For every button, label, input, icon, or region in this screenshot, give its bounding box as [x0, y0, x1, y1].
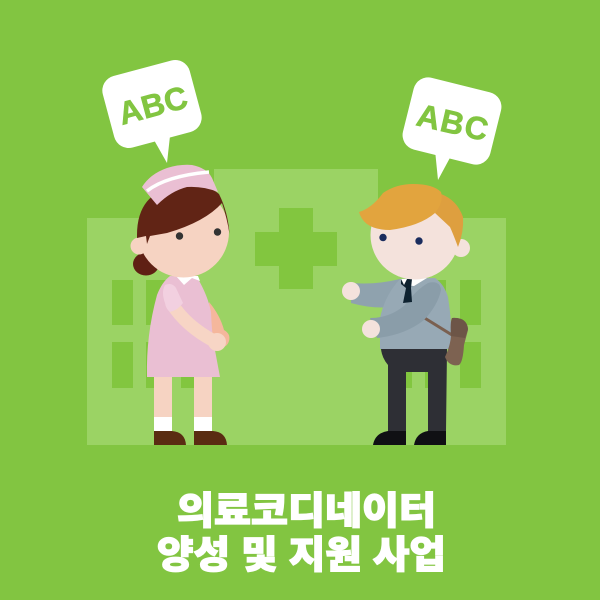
nurse cap stripe — [147, 172, 209, 191]
nurse hair bun — [133, 252, 159, 276]
nurse head — [138, 186, 229, 278]
title: 양성 및 지원 사업 — [157, 535, 446, 577]
title: 의료코디네이터 — [177, 491, 436, 533]
speech bubble: nurse ABC — [99, 57, 205, 163]
speech bubble: man ABC: ABC — [413, 97, 492, 148]
nurse socks — [154, 417, 212, 431]
nurse hand — [208, 333, 226, 351]
man character — [342, 184, 470, 445]
speech bubble: man ABC — [399, 74, 505, 180]
man legs and trousers — [381, 349, 447, 431]
hospital building — [87, 169, 506, 445]
nurse character — [130, 165, 230, 445]
nurse cap — [142, 165, 218, 205]
nurse collar — [176, 276, 200, 285]
man hair back — [435, 194, 463, 247]
nurse shoes — [154, 431, 227, 445]
nurse sleeve — [163, 284, 183, 312]
nurse legs — [154, 375, 212, 419]
title — [157, 491, 446, 577]
nurse ear — [130, 238, 148, 254]
man torso — [380, 278, 452, 349]
man shoes — [373, 431, 446, 445]
man ear — [452, 239, 470, 257]
man necktie — [401, 279, 412, 303]
man far arm — [351, 279, 400, 308]
speech bubble: nurse ABC: ABC — [114, 79, 191, 132]
nurse arm — [172, 304, 214, 341]
man head — [370, 190, 460, 280]
nurse eyes — [176, 228, 221, 240]
man hands — [342, 282, 380, 338]
man hair front — [359, 184, 442, 230]
man near arm — [370, 282, 441, 338]
icon: man shoulder bag — [423, 317, 468, 365]
nurse dress — [147, 276, 220, 377]
man shirt collar — [401, 278, 427, 286]
man eyes — [379, 234, 423, 245]
building windows — [112, 280, 481, 388]
nurse hair — [137, 185, 230, 244]
icon: hospital cross — [255, 208, 337, 289]
nurse far hand — [209, 302, 229, 348]
